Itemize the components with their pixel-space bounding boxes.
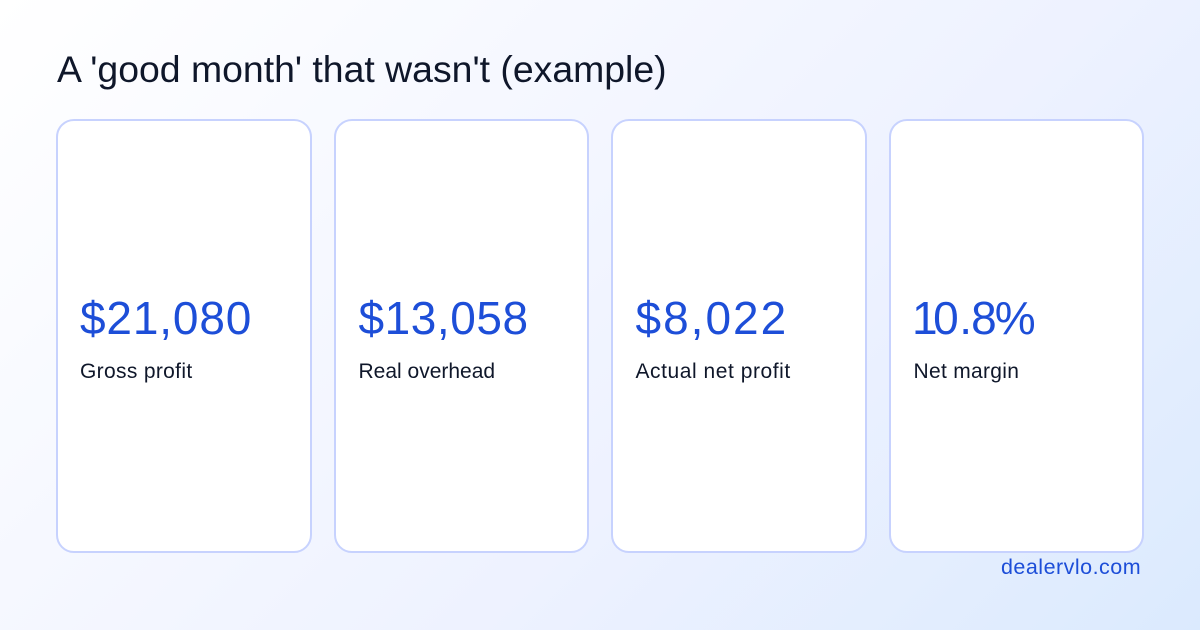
title: A 'good month' that wasn't (example) (57, 48, 667, 90)
label: gross profit: Gross profit (80, 360, 192, 383)
panel: gross profit (56, 119, 312, 553)
label: net margin: Net margin (914, 360, 1019, 383)
value: real overhead: $13,058 (358, 292, 529, 344)
panel: net margin (888, 119, 1144, 553)
value: net margin: 10.8% (912, 292, 1036, 344)
value: gross profit: $21,080 (80, 292, 252, 344)
panel: real overhead (334, 119, 589, 553)
brand footer: dealervlo.com (1001, 555, 1141, 579)
label: actual net profit: Actual net profit (636, 360, 791, 383)
value: actual net profit: $8,022 (636, 292, 788, 344)
panel: actual net profit (611, 119, 866, 553)
label: real overhead: Real overhead (358, 360, 495, 383)
